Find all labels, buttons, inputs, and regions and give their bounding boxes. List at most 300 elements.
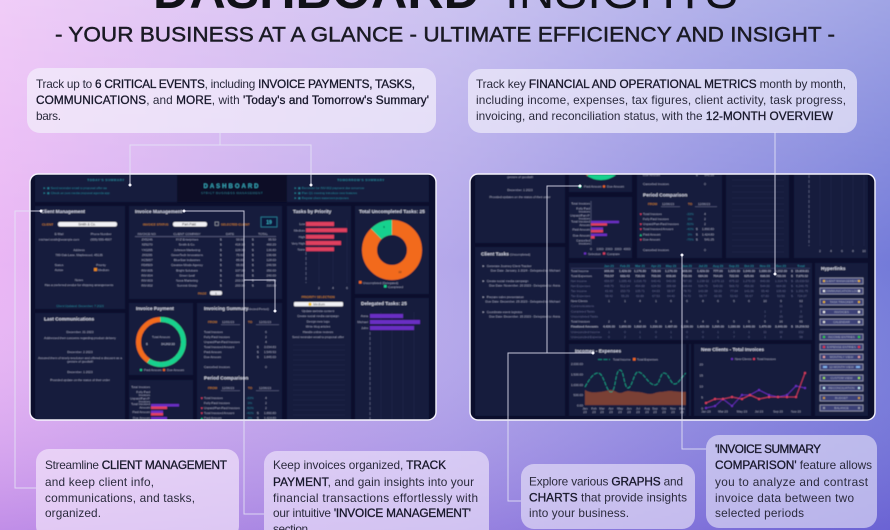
panel: client tasks: (Uncompleted) [510,252,530,256]
panel: invoice management: INV-003 [141,278,153,282]
table: 12-month overview: 1,440.00 [743,325,755,329]
panel: hyperlinks: 12-MONTH VIEW [829,365,854,369]
table: 12-month overview: 388.68 [666,284,676,288]
table: 12-month overview: 2 [608,320,610,324]
panel: period comparison: Period Comparison [643,192,687,198]
table: 12-month overview: 4 [624,320,626,324]
table: 12-month overview: Dec 23 [776,264,786,268]
chart: new clients and total invoices: Mar 23 [718,410,728,414]
table: 12-month overview: 53.56 [777,294,785,298]
table: 12-month overview: 448.75 [604,284,614,288]
table: 12-month overview: 1,405.00 [697,325,709,329]
chart: incomes and expenses: Nov [670,406,676,410]
panel: invoicing summary: Fully Paid Invoices [204,335,230,339]
panel: period comparison: 12/06/23 [698,202,710,206]
callout: critical events [27,68,436,133]
table: 12-month overview: 0 [702,335,704,339]
panel: invoice management: INV-004 [141,273,153,277]
chart: incomes and expenses: 23 [653,410,657,414]
table: 12-month overview: 908.00 [682,269,692,273]
table: 12-month overview: 728.00 [651,269,661,273]
panel: delegated tasks continuation [794,170,868,258]
panel: client management: Active [55,268,63,272]
panel: period comparison: ▼ [639,228,643,232]
table: 12-month overview: $ [791,289,793,293]
dashboard header: STRICT BUSINESS MANAGEMENT [201,191,263,195]
title [153,0,738,19]
table: 12-month overview: 5 [733,320,735,324]
panel: tasks by priority: Tasks by Priority [293,209,332,215]
panel: invoicing summary: FROM [208,320,218,324]
panel: invoicing summary: 1,860.80 [264,411,276,415]
panel: client management: Status [55,263,64,267]
panel: period comparison: Cancelled Invoices [643,248,669,252]
panel: tasks by priority: 4 [332,286,334,290]
panel: invoicing summary: Total Invoiced Amount [204,411,234,415]
table: 12-month overview: New Clients [571,299,588,303]
panel: invoicing summary: $ [257,345,259,349]
panel: client management: Client Updated: December, 7 2023 [56,304,104,308]
panel: hyperlinks: CLIENT MANAGEMENT [825,279,859,283]
table: 12-month overview: 2 [780,309,782,313]
panel: invoice management: Creative Minds Agency [171,263,203,267]
panel: comparison bar chart continuation: Selection [588,252,601,256]
panel: period comparison: -50% [686,222,694,226]
panel: tasks by priority: Update website content [302,309,334,313]
dashboard frames [30,174,875,420]
callout: client management: communications, and tasks, [45,491,195,505]
chart: incomes and expenses: 23 [618,410,622,414]
panel: invoicing summary: 1,845.00 [264,355,276,359]
table: 12-month overview: 700.00 [651,274,661,278]
callout: invoice management: Keep invoices organized, TRACK [273,458,446,472]
table: 12-month overview: 684.00 [698,274,708,278]
table: 12-month overview: Net Expenses [571,284,591,288]
table: 12-month overview: Nov 23 [760,264,770,268]
panel: invoice management: 460.20 [267,243,276,247]
table: 12-month overview: 0 [686,335,688,339]
panel: invoice management: INV-002 [141,284,153,288]
table: 12-month overview: 1 [639,335,641,339]
panel: comparison bar chart continuation: Cancelled [576,238,590,242]
table: 12-month overview: $ [791,279,793,283]
panel: invoice management: $ [252,273,254,277]
table: 12-month overview: 730.00 [682,274,692,278]
panel: last communications continuation: Assured them of timely resolution and offered a discount as a [478,171,562,175]
chart: new clients and total invoices: 15 [700,374,703,378]
table: 12-month overview: 1,040.00 [743,269,755,273]
table: 12-month overview: 10 [763,299,767,303]
chart: incomes and expenses: 500.00 [574,393,583,397]
table: 12-month overview: 64.03 [652,289,660,293]
chart: incomes and expenses: Dec [679,406,685,410]
table: 12-month overview: 750.57 [604,274,614,278]
panel: hyperlinks: Hyperlinks [821,266,846,272]
panel: tasks by priority: 2 [318,286,320,290]
panel: hyperlinks: EXPENSE ENTRIES [827,345,856,349]
panel: invoice management: YX0295 [141,248,153,252]
panel: invoicing summary: Period Comparison [204,376,248,382]
chart: incomes and expenses: 23 [680,410,684,414]
narrow strip panel [689,344,691,416]
panel: comparison bar chart continuation: Due Amount [573,234,590,238]
callout: invoice summary comparison: invoice data between two [715,491,854,505]
panel: last communications: Addressed their concerns regarding product delivery [44,336,116,340]
panel: invoice management: 246.58 [267,263,276,267]
panel: last communications: December, 31 2023 [66,330,94,334]
panel: invoice management: Summit Group [177,284,197,288]
callout: invoice summary comparison [706,435,877,528]
panel: invoicing summary: Paid Amount [204,416,222,420]
panel: last communications: Provided update on the status of their order [50,378,110,382]
panel: comparison bar chart continuation: 3000 [615,247,622,251]
chart: new clients and total invoices: 0 [701,406,703,410]
table: 12-month overview: 22 [799,314,803,318]
table: 12-month overview: Uncompleted Tasks [571,314,598,318]
panel: tasks by priority: Create social media campaign [297,314,339,318]
panel: client management: 789 Oak Lane, Maplewood, 45135 [55,253,103,257]
table: 12-month overview: Jan 23 [604,264,614,268]
panel: invoice management: Invoice Management [135,209,183,215]
panel: comparison bar chart: Due Amount [133,416,150,420]
chart: incomes and expenses: Total Expenses [637,358,658,362]
panel: invoice management: $ [220,253,222,257]
table: 12-month overview: 658.90 [666,274,676,278]
panel: invoice payment donut: $ [146,342,148,346]
panel: invoice management: $ [220,263,222,267]
panel: period comparison: 0 [704,248,706,252]
table: 12-month overview [569,263,812,340]
panel: invoicing summary: 0% [248,401,252,405]
chart: incomes and expenses: Total Income [613,358,631,362]
panel: invoice management: 90.00 [236,238,244,242]
chart: incomes and expenses: 23 [636,410,640,414]
panel: tasks by priority: 6 [346,286,348,290]
table: 12-month overview: 15,950.81 [795,269,809,273]
callout: invoice summary comparison: selected periods [715,506,804,520]
table: 12-month overview: 1,020.00 [728,269,740,273]
table: 12-month overview: 6 [686,320,688,324]
panel: comparison bar chart: Paid Amount [132,410,150,414]
chart: new clients and total invoices: Sep 23 [773,410,783,414]
panel: comparison bar chart continuation: Paid Amount [572,228,590,232]
panel: invoicing summary: Unpaid/Part-Paid Invoices [204,340,240,344]
callout: critical events: COMMUNICATIONS, and MORE, with 'Today's and Tomorrow's Summary' [36,93,429,107]
panel: tomorrow's summary: TOMORROW'S SUMMARY [337,178,385,182]
panel: invoice management: $ [220,273,222,277]
callout: graphs and charts [521,464,695,529]
callout: invoice management: our intuitive 'INVOICE MANAGEMENT' [273,506,471,520]
panel: last communications: December, 2 2023 [67,350,93,354]
panel: invoice management: 196.68 [267,253,276,257]
table: 12-month overview: 0 [624,330,626,334]
panel: comparison bar chart continuation: 2000 [606,247,613,251]
table: 12-month overview: Tax Expenses [571,294,591,298]
chart: incomes and expenses: 23 [592,410,596,414]
panel: client management: Has a preferred vendor for shipping arrangements [45,283,114,287]
panel: period comparison: ▼ [639,222,643,226]
panel: hyperlinks: BALANCE [834,406,849,410]
panel: delegated tasks: Anna [361,314,368,318]
panel: period comparison: $ [696,173,698,177]
panel: last communications: December, 1 2023 [67,370,93,374]
panel: period comparison: Due Amount [643,173,660,177]
table: 12-month overview: 722.00 [729,274,739,278]
table: 12-month overview: 664.00 [776,284,786,288]
panel: invoicing summary: $ [257,350,259,354]
panel: client management: Priority [96,263,106,267]
panel: invoice management: $ [252,248,254,252]
table: 12-month overview: 1,314.76 [775,279,787,283]
table: 12-month overview: Completed Tasks [571,309,595,313]
panel: delegated tasks: John [361,326,368,330]
panel: period comparison: TO [688,202,693,206]
panel: tasks by priority: PRIORITY SELECTION [301,295,335,299]
panel: client tasks: Due Date: December, 15 2023 - Delegated to: Anna [489,314,560,318]
panel: comparison bar chart: Invoices [139,393,150,397]
panel: invoice management: 85.00 [236,258,244,262]
panel: tasks by priority: High [299,235,305,239]
chart: new clients and total invoices: 20 [700,362,703,366]
callout: client management [36,449,239,530]
panel: invoicing summary: Total Invoiced Amount [204,345,234,349]
panel: invoicing summary: 12/01/23 [222,320,234,324]
panel: invoice management: SELECTED CLIENT [221,222,250,226]
panel: period comparison: 0% [688,232,692,236]
panel: comparison bar chart continuation: Invoices [579,242,590,246]
panel: period comparison: Total Invoiced Amount [643,227,673,231]
table: 12-month overview: 1,475.00 [759,325,771,329]
table: 12-month overview: Unreconciled Income [571,330,600,334]
panel: invoicing summary: $ [257,411,259,415]
table: 12-month overview: 60.95 [714,294,722,298]
chart: new clients and total invoices: May 23 [737,410,747,414]
panel: invoice payment continuation: Paid Amount [584,184,602,188]
table: 12-month overview: 143.08 [698,289,708,293]
chart: new clients and total invoices [694,344,811,416]
panel: invoice management: $ [220,238,222,242]
panel: invoice management: Green Leaf [179,273,195,277]
table: 12-month overview: 77.04 [730,289,738,293]
table: 12-month overview: 6 [686,299,688,303]
panel: invoice management: XZ9270 [142,243,153,247]
panel: invoice management: 95.00 [236,263,244,267]
panel: period comparison: 1,424.80 [702,232,714,236]
panel: period comparison: -33% [686,212,694,216]
panel: invoicing summary: $ [257,355,259,359]
panel: period comparison: 0 [704,182,706,186]
table: 12-month overview: Total [797,264,805,268]
panel: period comparison: $ [696,238,698,242]
table: 12-month overview: 1,487.00 [665,325,677,329]
table: 12-month overview: 11 [779,304,783,308]
panel: invoicing summary: ▼ [200,412,204,416]
panel: client management: E-Mail [55,232,64,236]
panel: total uncompleted tasks donut: Uncompleted (Delegated) [363,281,398,285]
panel: invoicing summary: 3,094.83 [264,345,276,349]
table: 12-month overview: 1,085.43 [619,279,631,283]
table: 12-month overview: 5 [655,320,657,324]
panel: today's summary: ► ▣ Check on post media proposal agenda app [43,191,110,195]
table: 12-month overview: 1 [764,309,766,313]
table: 12-month overview: 53.62 [730,294,738,298]
panel: comparison bar chart continuation: Total Invoiced [571,220,590,224]
panel: invoice management: $ [252,263,254,267]
chart: incomes and expenses: 1,000.00 [571,383,583,387]
table: 12-month overview: 15,030.52 [795,279,809,283]
panel: client tasks: Due Date: November, 20 2023 - Delegated to: Anna [489,284,560,288]
table: 12-month overview: 625.60 [744,274,754,278]
panel: today's summary [35,175,177,202]
panel: invoice management: 310.00 [267,278,276,282]
table: 12-month overview: 152 [798,330,804,334]
panel: comparison bar chart: Unpaid/Part-P. [130,396,150,400]
table: 12-month overview: Jun 23 [682,264,692,268]
chart: new clients and total invoices: New Clients - Total Invoices [701,347,764,353]
panel: invoicing summary: Due Amount [204,355,221,359]
panel: invoice management: DATE [226,232,234,236]
panel: invoice payment continuation: Due Amount [607,184,624,188]
table: 12-month overview: 74.70 [683,294,691,298]
table: 12-month overview: 724.07 [797,294,807,298]
table: 12-month overview: 1 [608,330,610,334]
panel: hyperlinks: CUSTOM VIEW [830,376,853,380]
panel: client management: Smith & Co. [78,222,96,226]
table: 12-month overview: 840.00 [760,279,770,283]
panel: total uncompleted tasks donut [355,206,429,294]
panel: invoice management: $ [252,284,254,288]
panel: invoicing summary: 2 [265,335,267,339]
panel: invoice management [129,206,282,299]
panel: period comparison: Paid Amount [643,232,661,236]
panel: invoice payment donut: Invoice Payment [136,306,174,312]
callout: invoice summary comparison: 'INVOICE SUMMARY [715,442,821,456]
table: 12-month overview: 67.00 [761,294,769,298]
callout: critical events: bars. [36,109,61,123]
panel: delegated tasks [355,298,429,420]
table: 12-month overview: 1 [717,335,719,339]
panel: hyperlinks: MONTHLY VIEW [830,355,853,359]
panel: client management: Notes [75,278,83,282]
panel: invoicing summary: ▼ [200,406,204,410]
panel: delegated tasks continuation: 6 [841,249,843,253]
panel: period comparison: ▲ [639,233,643,237]
panel: client management: michael.smith@example.com [39,238,80,242]
table: 12-month overview: 1 [764,335,766,339]
panel: period comparison: Fully Paid Invoices [643,217,669,221]
panel: client management: Address [73,248,85,252]
callout: graphs and charts: CHARTS that provide insights [529,490,687,504]
panel: today's summary: ► ▣ Send reminder email to proposal offer aa [43,186,107,190]
table: 12-month overview: 1 [733,330,735,334]
table: 12-month overview: 787.00 [682,279,692,283]
panel: comparison bar chart continuation: Fully Paid [576,206,590,210]
panel: period comparison: 0% [688,217,692,221]
panel: tomorrow's summary [287,175,429,202]
panel: delegated tasks continuation: 2 [819,249,821,253]
panel: invoicing summary: 12/06/23 [259,386,271,390]
table: 12-month overview: 696.00 [760,274,770,278]
table: 12-month overview: Tax Income [571,289,587,293]
chart: incomes and expenses: Jul [636,406,640,410]
table: 12-month overview: Total Income [571,269,589,273]
panel: invoicing summary: TO [248,320,253,324]
panel: period comparison: $ [696,232,698,236]
panel: invoice management: $ [252,278,254,282]
panel: invoicing summary: TO [248,386,253,390]
panel: invoicing summary: $ [257,416,259,420]
panel: last communications continuation: December, 1 2023 [507,188,533,192]
table: 12-month overview: 0 [655,330,657,334]
panel: invoice management: 19 [266,220,272,226]
panel: comparison bar chart continuation: 4000 [624,247,631,251]
table: 12-month overview: Aug 23 [713,264,723,268]
panel: client management: CLIENT [42,222,53,226]
panel: hyperlinks: INCOME ENTRIES [828,335,855,339]
panel: last communications: gesture of goodwill [67,360,93,364]
panel: comparison bar chart continuation: Invoices [579,210,590,214]
table: 12-month overview: 98.97 [667,289,675,293]
panel: hyperlinks: BUDGET [835,396,848,400]
panel: invoice management: Part-Paid [182,222,196,226]
panel: invoice payment continuation [569,174,632,192]
panel: invoice management: 128.00 [267,258,276,262]
table: 12-month overview: Communications [571,304,594,308]
chart: incomes and expenses: 23 [671,410,675,414]
panel: tasks by priority: None [298,248,305,252]
panel: tasks by priority: Handle online reviews [303,330,334,334]
panel: invoice management: 200.00 [235,284,245,288]
callout: client management: organized. [45,506,101,520]
panel: period comparison: Cancelled Invoices [643,182,669,186]
table: 12-month overview: 1,316.00 [650,325,662,329]
table: 12-month overview: 67.53 [652,294,660,298]
callout: critical events: Track up to 6 CRITICAL EVENTS, including INVOICE PAYMENTS, TASKS, [36,77,415,91]
panel: invoice management: $ [252,238,254,242]
table: 12-month overview: 1,198.92 [697,279,709,283]
table: 12-month overview: Total Invoices [571,320,590,324]
table: 12-month overview: 4 [639,320,641,324]
table: 12-month overview: 730.00 [635,274,645,278]
table: 12-month overview: 8 [702,299,704,303]
table: 12-month overview: 689.43 [620,274,630,278]
table: 12-month overview: 81.66 [605,289,613,293]
table: 12-month overview: $ [791,274,793,278]
table: 12-month overview: 940.00 [666,279,676,283]
callout: invoice management: financial transactions effortlessly with [273,491,478,505]
panel: invoice management: FD8509 [141,263,153,267]
panel: total uncompleted tasks donut: 3 [383,225,385,229]
chart: incomes and expenses: Oct [662,406,667,410]
panel: invoicing summary: Paid Amount [204,350,222,354]
panel: invoice payment donut: Paid Amount [144,368,162,372]
panel: comparison bar chart: Total Invoiced [131,402,150,406]
connector lines and dots [15,132,776,514]
panel: invoice management: 418.10 [235,243,245,247]
panel: invoice management: $ [220,284,222,288]
panel: invoice management: 75.60 [236,253,244,257]
table: 12-month overview: 3 [800,309,802,313]
panel: last communications continuation: gesture of goodwill [507,175,533,179]
table: 12-month overview: $ [791,284,793,288]
panel: client tasks: ► Create social media campaign [482,279,529,283]
panel: tasks by priority: Very High [292,241,305,245]
table: 12-month overview: 644.44 [682,284,692,288]
panel: tasks by priority: Low [299,222,306,226]
panel: invoice payment donut [129,303,193,375]
panel: tomorrow's summary: ► ▣ Regular client statement purposes [294,196,349,200]
chart: new clients and total invoices: 5 [701,396,703,400]
